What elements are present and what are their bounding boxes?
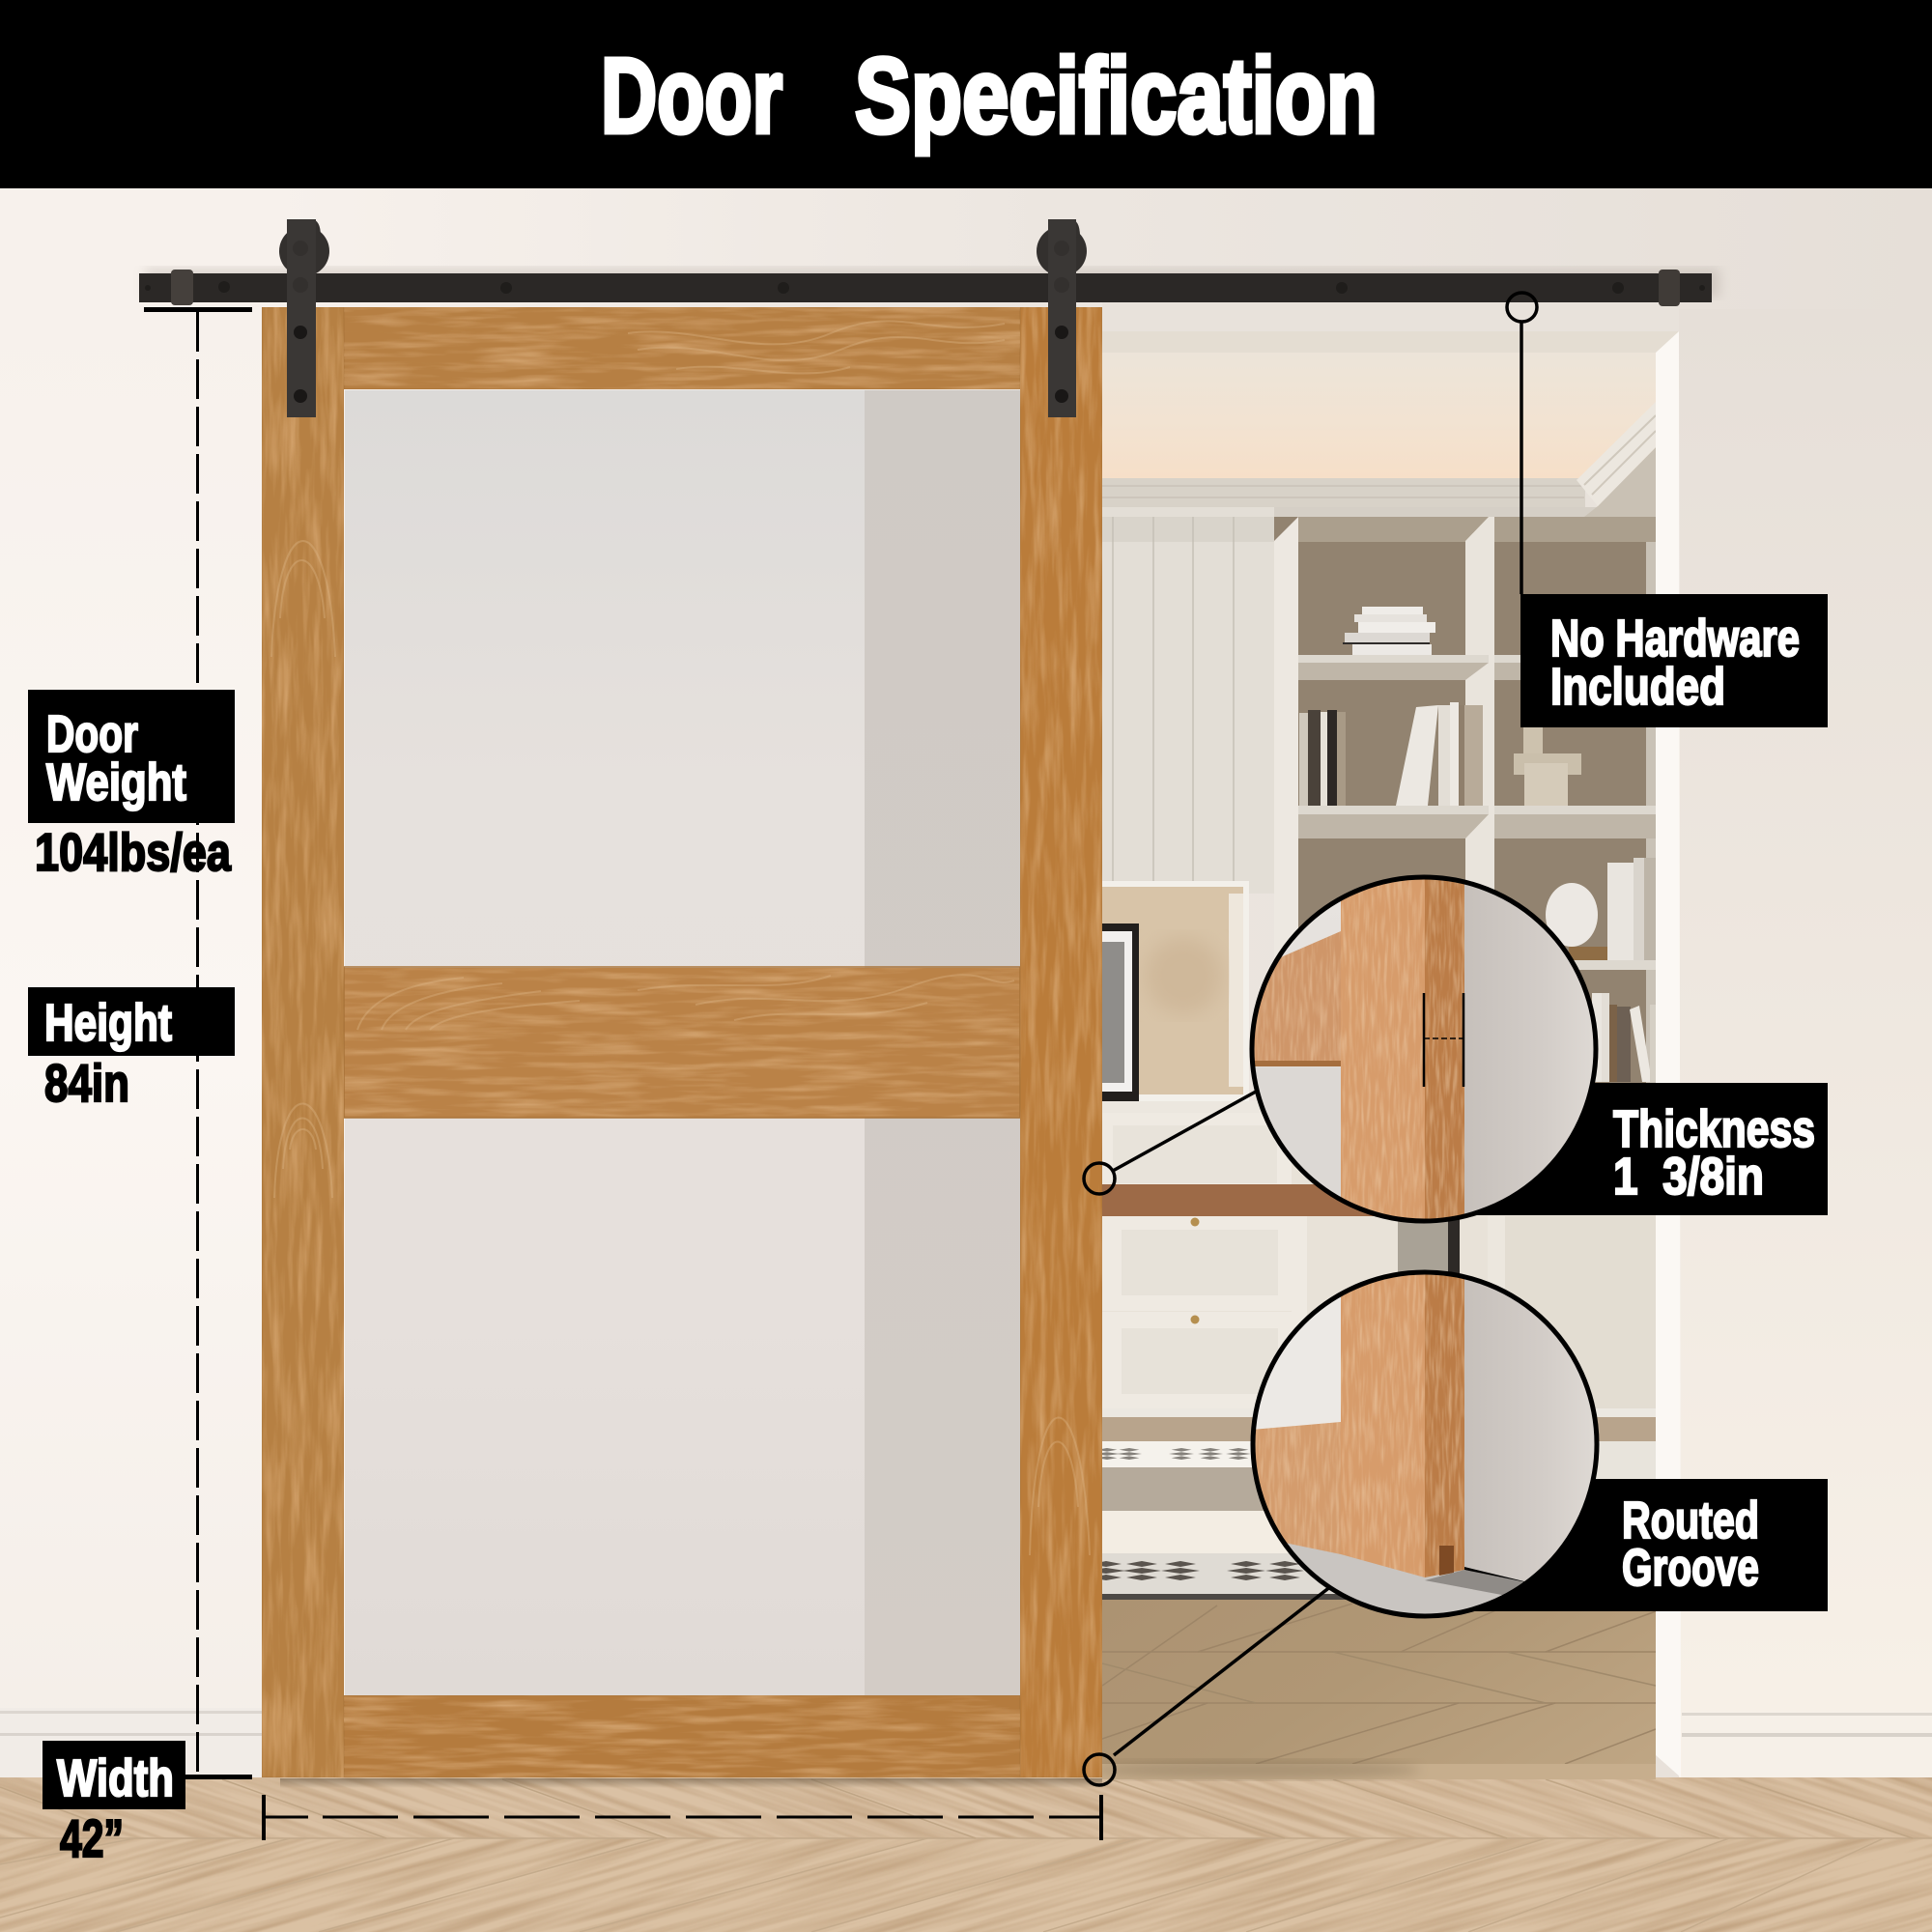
left stop	[171, 270, 193, 305]
horizontal book stack	[1343, 607, 1435, 655]
middle rail	[344, 967, 1020, 1118]
vertical books right	[1396, 702, 1483, 806]
label: routed groove	[1622, 1492, 1759, 1597]
title: Door	[601, 37, 782, 156]
label: routed groove: Groove	[1622, 1539, 1759, 1597]
framed artwork	[1102, 881, 1249, 1101]
callout: width	[43, 1741, 185, 1809]
leader to groove detail	[1084, 1586, 1331, 1785]
bookshelf	[1274, 517, 1656, 1106]
value: width: 42”	[60, 1808, 124, 1868]
black framed photo	[1102, 923, 1139, 1101]
walnut desktop	[1102, 1184, 1392, 1216]
room floor	[1102, 1408, 1656, 1779]
rail shadow	[145, 269, 1719, 298]
right hanger	[1037, 219, 1087, 417]
right stop	[1659, 270, 1680, 306]
left stile	[262, 307, 344, 1777]
right stile	[1020, 307, 1102, 1777]
track bolts	[145, 281, 1705, 294]
detail circle: routed groove	[1252, 1271, 1604, 1623]
main floor	[0, 1777, 1932, 1932]
title: Specification	[855, 37, 1378, 156]
value: door weight: 104lbs/ea	[35, 822, 231, 882]
left hanger	[279, 219, 329, 417]
thickness mark	[1424, 993, 1463, 1087]
callout: no hardware included	[1520, 594, 1828, 727]
vertical books left	[1299, 710, 1346, 806]
height dimension line	[144, 307, 252, 1779]
label: thickness: 1 3/8in	[1613, 1148, 1764, 1206]
bottom rail	[344, 1695, 1020, 1777]
glass panels	[345, 390, 1020, 1696]
lower right books	[1592, 993, 1656, 1082]
callout: door weight: Door	[46, 705, 138, 763]
callout: height: Height	[44, 994, 172, 1052]
callout: width: Width	[57, 1749, 174, 1807]
sculpture	[1514, 686, 1581, 806]
value: height: 84in	[44, 1053, 129, 1113]
lower cabinets	[1102, 1101, 1656, 1415]
room ceiling and soffit	[1102, 302, 1679, 517]
title bar	[0, 0, 1932, 188]
doorway jamb	[1656, 331, 1681, 1777]
leader to thickness detail	[1084, 1092, 1256, 1194]
vase and upper right books	[1546, 858, 1656, 960]
callout: door weight	[28, 690, 235, 823]
beadboard wall	[1102, 507, 1274, 894]
room seen through doorway	[1087, 302, 1679, 1779]
callout: no hardware included: Included	[1550, 658, 1725, 716]
callout box: routed groove	[1449, 1479, 1828, 1611]
callout: no hardware included: No Hardware	[1550, 610, 1800, 668]
rug	[1087, 1441, 1656, 1600]
label: thickness: Thickness	[1613, 1100, 1815, 1158]
callout: no hardware leader	[1507, 293, 1537, 594]
detail circle: thickness	[1252, 874, 1600, 1227]
floor shadow beside door	[1092, 1760, 1420, 1779]
baseboards	[0, 1708, 1932, 1777]
top rail	[344, 307, 1020, 389]
wood swirl figure	[271, 321, 1090, 1555]
title	[601, 37, 1378, 156]
label: routed groove: Routed	[1622, 1492, 1759, 1549]
rug diamond pattern	[1087, 1448, 1304, 1580]
width dimension line	[262, 1795, 1103, 1840]
sliding door	[262, 307, 1102, 1777]
floor shadow under door	[280, 1778, 1102, 1788]
callout box: thickness	[1449, 1083, 1828, 1215]
barn door track rail	[139, 270, 1712, 306]
label: thickness	[1613, 1100, 1815, 1206]
callout: door weight: Weight	[46, 753, 186, 811]
callout: height	[28, 987, 235, 1056]
